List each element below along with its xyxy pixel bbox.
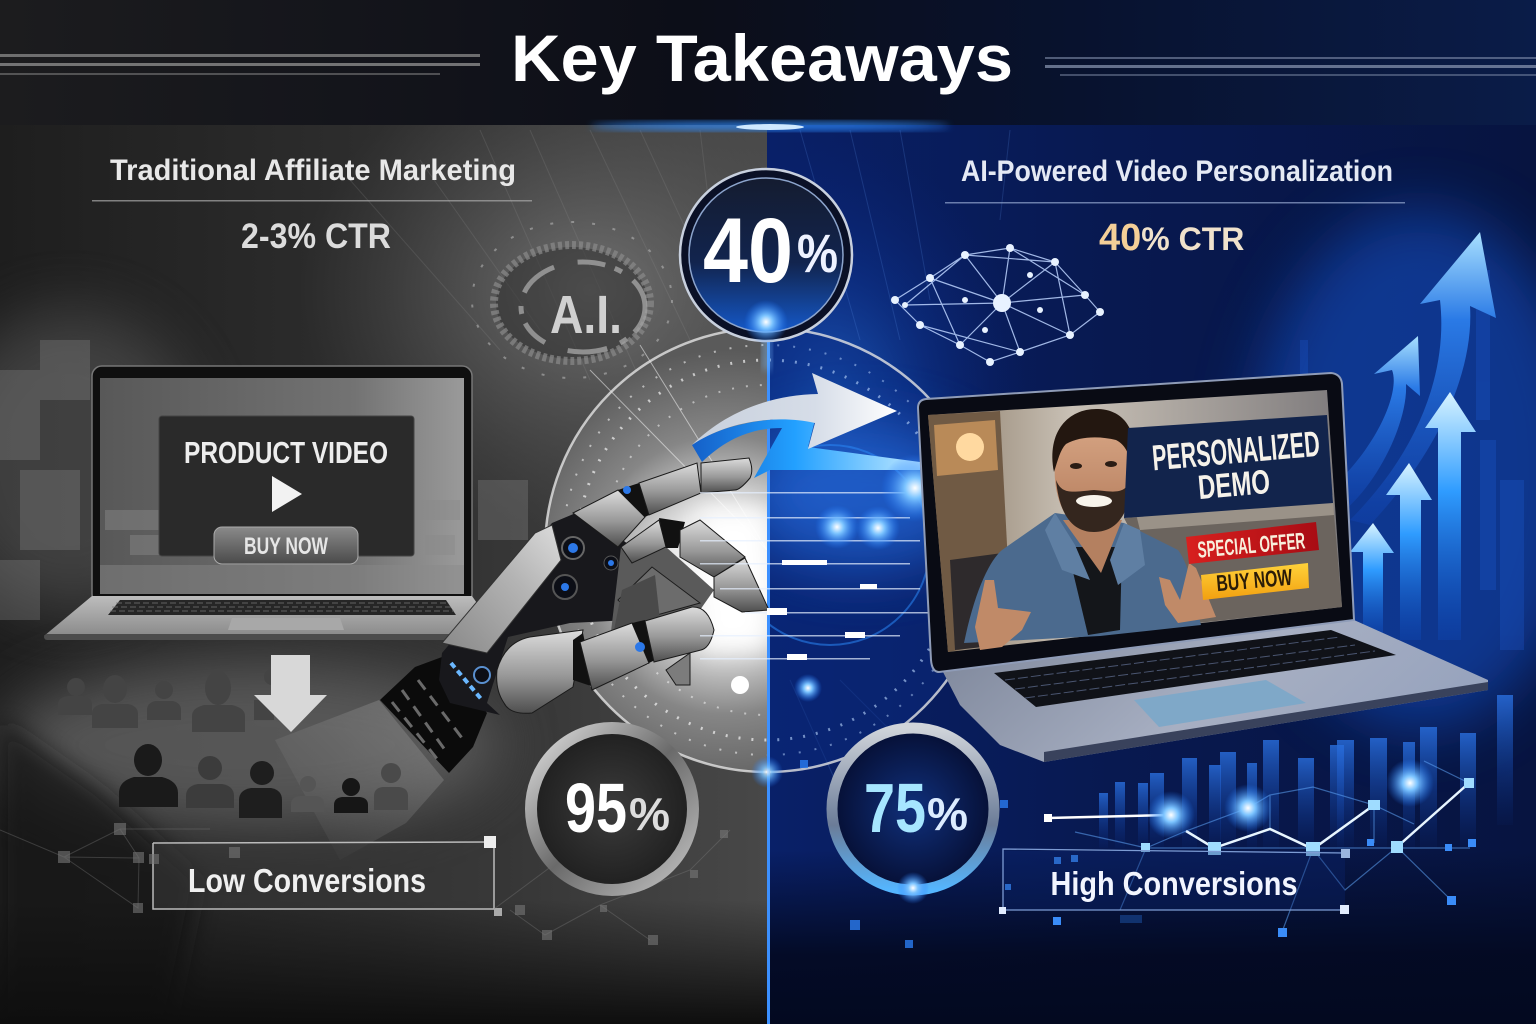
label: low conversions (153, 836, 502, 916)
personalized demo banner: PERSONALIZED (1150, 423, 1321, 478)
index finger (573, 458, 752, 547)
badge: 40% (680, 169, 852, 344)
buy now button: BUY NOW (1215, 564, 1293, 596)
badge: 95%: 95 (565, 769, 627, 847)
video panel: PRODUCT VIDEO (184, 435, 388, 470)
laptop base (44, 596, 500, 640)
robot hand (380, 458, 769, 773)
right heading: AI-Powered Video Personalization (961, 155, 1393, 188)
buy now button (214, 527, 358, 564)
icon: play (272, 476, 302, 512)
badge: 95%: % (629, 788, 670, 840)
badge: 75% (832, 728, 994, 904)
curved arrow: left to right (692, 373, 920, 478)
laptop screen (92, 366, 472, 604)
label: high conversions (999, 849, 1350, 914)
badge: 40%: % (797, 224, 838, 284)
lens joints (474, 537, 618, 683)
hand core (439, 510, 645, 715)
icon: neural network globe (891, 244, 1104, 366)
right CTR: 40% CTR (1099, 217, 1244, 259)
special offer button (1186, 522, 1319, 564)
left CTR: 2-3% CTR (241, 217, 391, 256)
title bar (0, 0, 1536, 125)
buy now button (1201, 563, 1309, 600)
top center blue glow (590, 122, 950, 130)
middle finger (621, 518, 769, 612)
badge: 95% (531, 728, 693, 890)
central dotted circular radar (545, 328, 989, 772)
title: Key Takeaways (511, 21, 1013, 95)
right laptop (918, 373, 1488, 762)
video panel (159, 416, 414, 564)
laptop lid (918, 373, 1354, 672)
personalized demo banner (1124, 415, 1333, 518)
forearm plate (442, 525, 561, 653)
bar chart background (1099, 695, 1513, 848)
left heading: Traditional Affiliate Marketing (110, 154, 516, 187)
decorative title rule lines left (0, 54, 480, 75)
icon: A.I. dial: A.I. (550, 285, 622, 345)
decorative blue squares (800, 760, 1142, 948)
laptop base (943, 620, 1488, 762)
center divider line (751, 320, 783, 1024)
man (964, 409, 1216, 650)
data streams to laptop (700, 454, 949, 702)
audience: people icons with down arrow (58, 655, 408, 818)
label: high conversions: High Conversions (1050, 865, 1298, 902)
network nodes left (0, 823, 730, 945)
badge: 40%: 40 (703, 200, 793, 302)
thumb (497, 607, 714, 713)
buy now button: BUY NOW (244, 533, 328, 560)
panel: traditional heading (92, 154, 532, 256)
badge: 75%: % (927, 788, 968, 840)
blue LED strip (451, 663, 482, 700)
decorative title rule lines right (1045, 57, 1536, 76)
panel: AI-powered heading (945, 155, 1405, 259)
video screen (928, 390, 1342, 652)
ring finger (618, 567, 700, 620)
special offer button: SPECIAL OFFER (1196, 527, 1306, 563)
icon: A.I. dial (472, 222, 672, 378)
growth arrows (1340, 232, 1496, 640)
personalized demo banner: DEMO (1197, 463, 1272, 507)
label: low conversions: Low Conversions (188, 862, 426, 899)
badge: 75%: 75 (864, 769, 926, 847)
left laptop (44, 366, 500, 640)
wrist cuff (380, 657, 487, 773)
icon: down arrow (254, 655, 327, 732)
light beam behind cuff (275, 700, 444, 860)
line chart (1005, 759, 1476, 937)
palm shadow between fingers (610, 547, 714, 640)
